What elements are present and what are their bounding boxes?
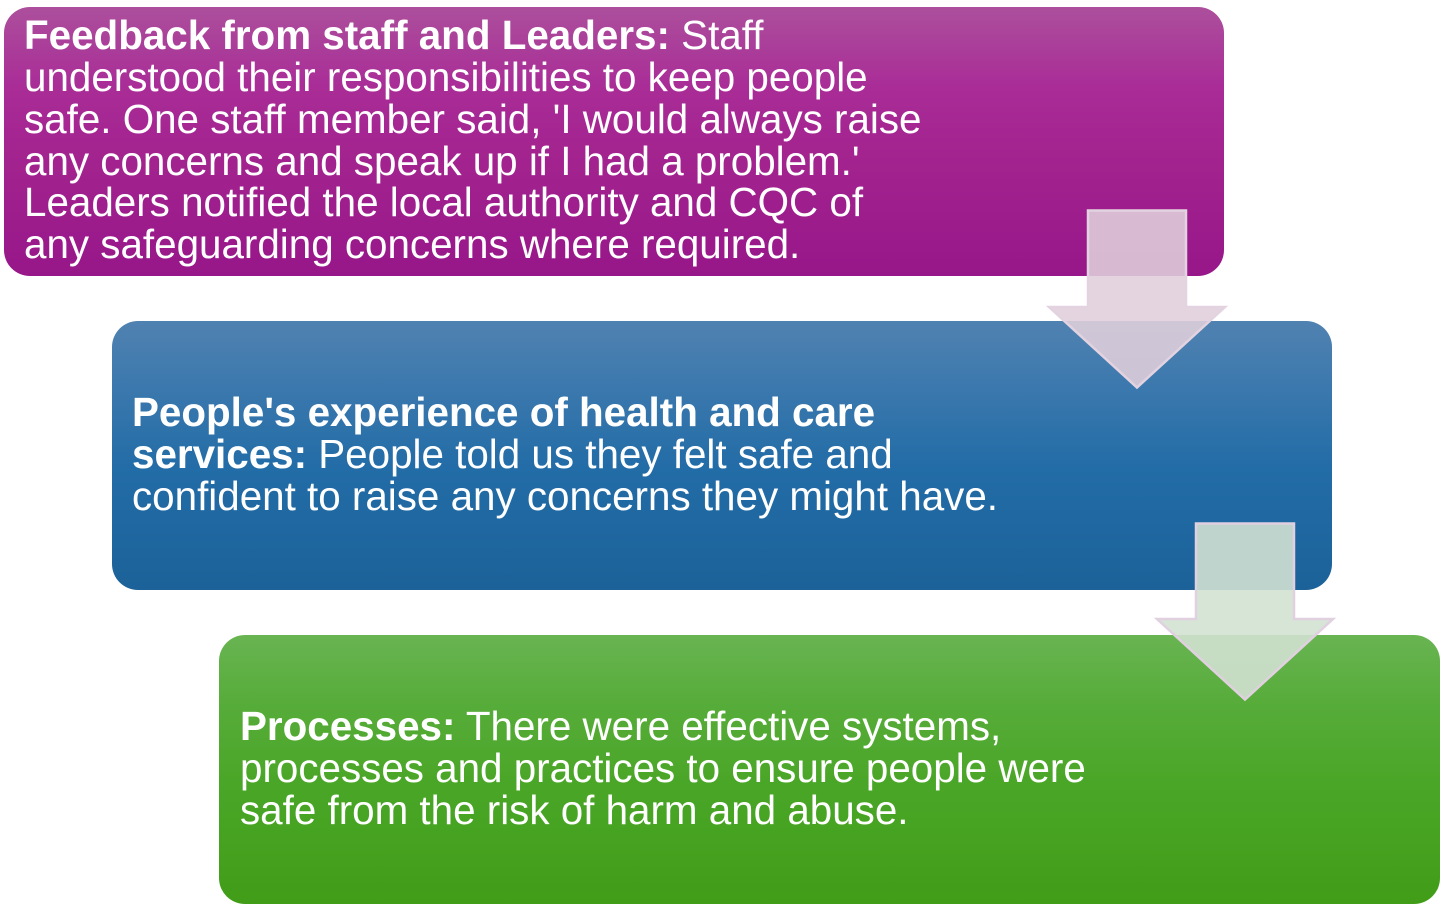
panel: people's experience	[112, 321, 1332, 590]
text: people's experience of health and care services: confident to raise any concerns they might have.	[132, 473, 998, 519]
text: people's experience of health and care services: services: People told us they felt safe and	[132, 431, 893, 477]
text: people's experience of health and care services: People's experience of health and care	[132, 389, 875, 435]
text: feedback from staff and leaders: Leaders notified the local authority and CQC of	[24, 179, 863, 225]
text: processes: safe from the risk of harm and abuse.	[240, 787, 908, 833]
text: feedback from staff and leaders: any safeguarding concerns where required.	[24, 221, 800, 267]
text: processes	[240, 703, 1086, 833]
text: feedback from staff and leaders: understood their responsibilities to keep people	[24, 54, 868, 100]
text: feedback from staff and leaders	[24, 12, 922, 267]
text: people's experience of health and care services	[132, 389, 998, 519]
text: feedback from staff and leaders: safe. One staff member said, 'I would always raise	[24, 96, 922, 142]
panel: feedback from staff and leaders	[4, 7, 1224, 276]
text: processes: processes and practices to ensure people were	[240, 745, 1086, 791]
text: feedback from staff and leaders: any concerns and speak up if I had a problem.'	[24, 138, 860, 184]
panel: processes	[219, 635, 1440, 904]
text: feedback from staff and leaders: Feedback from staff and Leaders: Staff	[24, 12, 763, 58]
text: processes: Processes: There were effective systems,	[240, 703, 1001, 749]
